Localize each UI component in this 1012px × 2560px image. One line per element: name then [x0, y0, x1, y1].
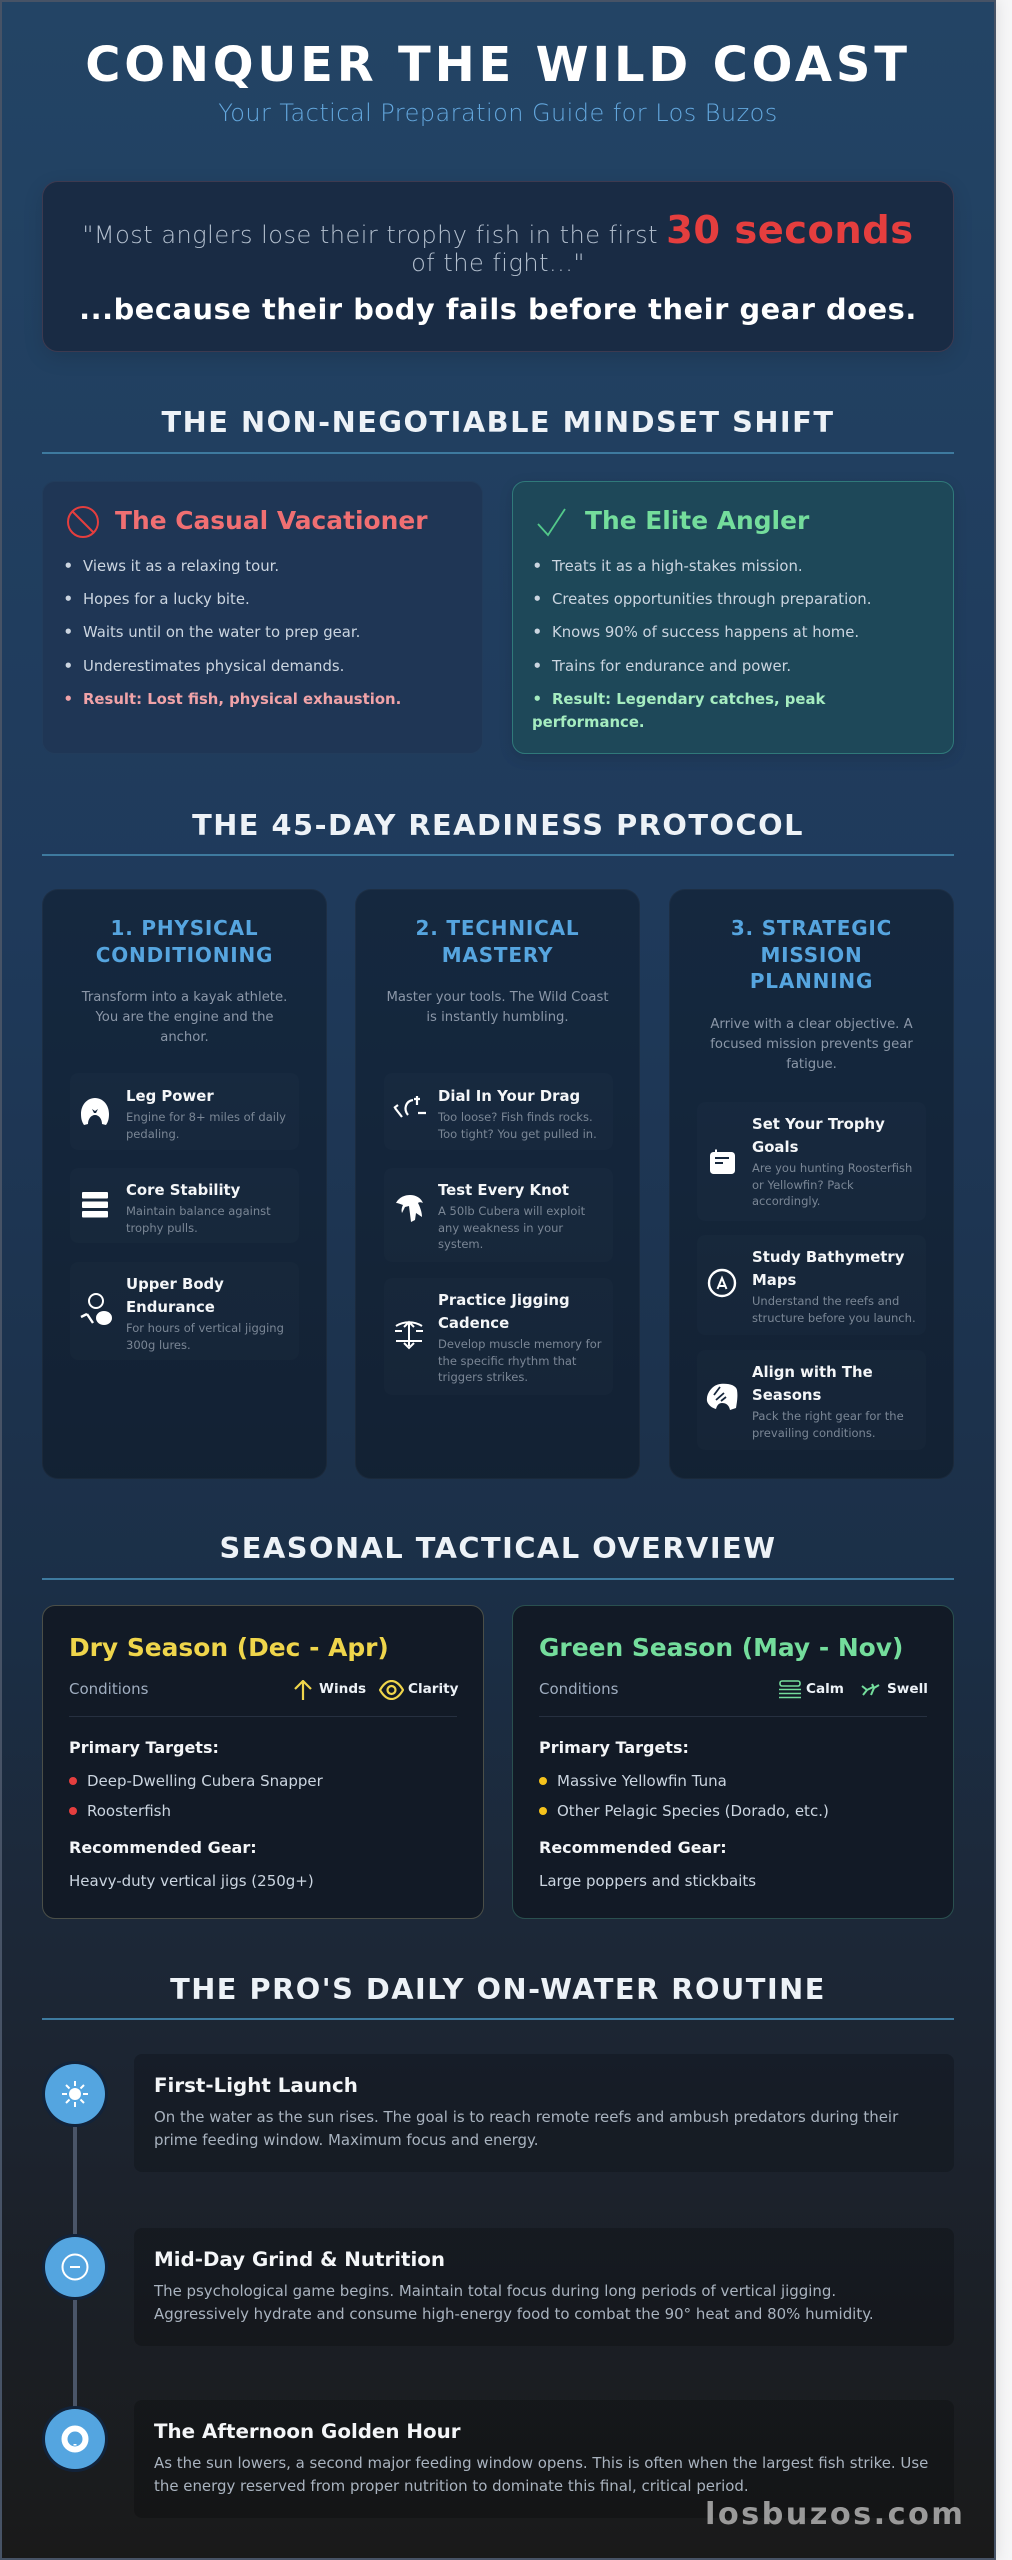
subtitle: Your Tactical Preparation Guide for Los Buzos	[218, 99, 778, 127]
item text	[126, 1204, 271, 1235]
elite angler list: Creates opportunities through preparation.	[552, 590, 871, 608]
item text: system.	[438, 1237, 483, 1251]
item text: Engine for 8+ miles of daily	[126, 1110, 286, 1124]
step text: the energy reserved from proper nutrition to dominate this final, critical period.	[154, 2477, 749, 2495]
icon: minus circle	[60, 2252, 90, 2282]
targets list: Deep-Dwelling Cubera Snapper	[87, 1772, 323, 1790]
icon: check mark	[537, 508, 566, 536]
icon: map circle	[708, 1268, 736, 1298]
panel: technical mastery	[355, 889, 640, 1479]
column description: fatigue.	[786, 1057, 837, 1072]
panel: the casual vacationer: •	[64, 656, 73, 674]
icon: prohibited	[67, 506, 99, 538]
step: afternoon golden hour	[134, 2400, 954, 2518]
item text: prevailing conditions.	[752, 1426, 876, 1440]
item heading: Set Your Trophy	[752, 1115, 885, 1133]
swell label: Swell	[887, 1681, 928, 1697]
icon: jig cadence	[395, 1320, 423, 1350]
item heading: Dial In Your Drag	[438, 1087, 580, 1105]
item text	[126, 1110, 286, 1141]
item text: Pack the right gear for the	[752, 1409, 904, 1423]
season heading: Green Season (May - Nov)	[539, 1633, 903, 1662]
item text: any weakness in your	[438, 1221, 563, 1235]
icon: leg	[81, 1098, 109, 1125]
panel: the elite angler: •	[532, 656, 542, 674]
item heading	[752, 1115, 885, 1156]
panel: the elite angler: •	[532, 590, 542, 608]
item heading: Goals	[752, 1138, 798, 1156]
column description: Arrive with a clear objective. A	[710, 1017, 913, 1032]
icon: core bars	[82, 1192, 108, 1218]
item text	[438, 1204, 585, 1251]
icon: wind arrow	[294, 1680, 312, 1700]
icon: season mound	[706, 1384, 738, 1410]
item: upper body endurance	[70, 1262, 299, 1360]
panel: the casual vacationer: •	[64, 623, 73, 641]
quote punchline: ...because their body fails before their gear does.	[79, 292, 917, 326]
panel: strategic mission planning	[669, 889, 954, 1479]
column heading	[731, 916, 892, 993]
step text	[154, 2452, 928, 2499]
timeline marker: sun	[45, 2064, 105, 2124]
item text: Too tight? You get pulled in.	[438, 1127, 597, 1141]
elite angler list: Result: Legendary catches, peak	[552, 690, 825, 708]
item: set your trophy goals	[697, 1102, 926, 1221]
column heading: MISSION	[760, 942, 863, 966]
item text: 300g lures.	[126, 1338, 191, 1352]
column description: anchor.	[160, 1030, 209, 1045]
item heading: Align with The	[752, 1363, 873, 1381]
item text	[126, 1321, 284, 1352]
elite angler list: Trains for endurance and power.	[552, 656, 791, 674]
column description: Master your tools. The Wild Coast	[386, 990, 609, 1005]
gear heading: Recommended Gear:	[69, 1838, 257, 1857]
item: study bathymetry maps	[697, 1235, 926, 1335]
heading: seasonal overview: SEASONAL TACTICAL OVERVIEW	[220, 1531, 776, 1565]
item text: A 50lb Cubera will exploit	[438, 1204, 585, 1218]
step heading: The Afternoon Golden Hour	[154, 2420, 461, 2443]
item text: structure before you launch.	[752, 1311, 916, 1325]
item heading: Leg Power	[126, 1087, 214, 1105]
item heading	[438, 1291, 570, 1332]
item text: trophy pulls.	[126, 1221, 198, 1235]
heading: casual vacationer: The Casual Vacationer	[115, 506, 428, 535]
column description	[82, 990, 287, 1045]
icon: drag reel	[393, 1096, 426, 1118]
panel: green season	[512, 1605, 954, 1919]
item text: Too loose? Fish finds rocks.	[438, 1110, 593, 1124]
item text: the specific rhythm that	[438, 1354, 576, 1368]
clarity label: Clarity	[408, 1681, 459, 1697]
elite angler list: Treats it as a high-stakes mission.	[552, 557, 803, 575]
column heading: PLANNING	[750, 969, 873, 993]
icon: calm bars	[779, 1680, 801, 1698]
timeline marker: mid-day	[45, 2237, 105, 2297]
targets list: Massive Yellowfin Tuna	[557, 1772, 727, 1790]
item heading: Upper Body	[126, 1275, 224, 1293]
item: dial in your drag	[384, 1073, 613, 1150]
item heading	[752, 1363, 873, 1404]
casual vacationer list: Views it as a relaxing tour.	[83, 557, 279, 575]
casual vacationer list	[64, 557, 401, 708]
step: first-light launch	[134, 2054, 954, 2172]
targets list	[69, 1772, 323, 1820]
panel: the elite angler: •	[532, 623, 542, 641]
targets list	[539, 1772, 829, 1820]
column description: Transform into a kayak athlete.	[82, 990, 287, 1005]
gear heading: Recommended Gear:	[539, 1838, 727, 1857]
icon: ring	[60, 2424, 90, 2454]
step text: As the sun lowers, a second major feeding window opens. This is often when the largest fish strike. Use	[154, 2454, 928, 2472]
panel: physical conditioning	[42, 889, 327, 1479]
item heading: Core Stability	[126, 1181, 240, 1199]
item text	[438, 1337, 602, 1384]
heading: daily routine: THE PRO'S DAILY ON-WATER ROUTINE	[170, 1972, 826, 2006]
panel: the casual vacationer: •	[64, 690, 73, 708]
column description: focused mission prevents gear	[710, 1037, 913, 1052]
icon: swell arrows	[861, 1684, 880, 1696]
quote first line: "Most anglers lose their trophy fish in the first 30 seconds	[82, 208, 914, 253]
item heading: Endurance	[126, 1298, 215, 1316]
item text	[752, 1294, 916, 1325]
item text: pedaling.	[126, 1127, 179, 1141]
column description: You are the engine and the	[95, 1010, 274, 1025]
item text: For hours of vertical jigging	[126, 1321, 284, 1335]
step text: prime feeding window. Maximum focus and energy.	[154, 2131, 538, 2149]
step text	[154, 2106, 898, 2153]
panel: the casual vacationer: •	[64, 590, 73, 608]
step heading: Mid-Day Grind & Nutrition	[154, 2248, 445, 2271]
casual vacationer list: Hopes for a lucky bite.	[83, 590, 250, 608]
item text: Maintain balance against	[126, 1204, 271, 1218]
winds label: Winds	[319, 1681, 366, 1697]
item text: Are you hunting Roosterfish	[752, 1161, 912, 1175]
icon: arm and dumbbell	[80, 1293, 112, 1325]
icon: trophy note	[710, 1150, 735, 1174]
step text	[154, 2280, 874, 2327]
heading: elite angler: The Elite Angler	[585, 506, 809, 535]
item text	[752, 1409, 904, 1440]
step text: Aggressively hydrate and consume high-energy food to combat the 90° heat and 80% humidity.	[154, 2305, 874, 2323]
elite angler list	[532, 557, 871, 731]
item heading: Seasons	[752, 1386, 821, 1404]
panel: the elite angler	[512, 481, 954, 754]
panel: dry season	[42, 1605, 484, 1919]
item text	[752, 1161, 912, 1208]
item heading: Practice Jigging	[438, 1291, 570, 1309]
watermark: losbuzos.com	[705, 2497, 965, 2532]
targets heading: Primary Targets:	[69, 1738, 219, 1757]
icon: sun	[60, 2079, 90, 2109]
column heading: MASTERY	[442, 942, 553, 966]
column heading: CONDITIONING	[96, 942, 273, 966]
heading: readiness protocol: THE 45-DAY READINESS PROTOCOL	[192, 808, 804, 842]
item heading: Cadence	[438, 1314, 509, 1332]
casual vacationer list: Waits until on the water to prep gear.	[83, 623, 360, 641]
targets heading: Primary Targets:	[539, 1738, 689, 1757]
item heading: Test Every Knot	[438, 1181, 569, 1199]
icon: eye	[379, 1680, 404, 1700]
column heading: 1. PHYSICAL	[111, 916, 258, 940]
step text: On the water as the sun rises. The goal is to reach remote reefs and ambush predators during their	[154, 2108, 898, 2126]
item text	[438, 1110, 597, 1141]
title: CONQUER THE WILD COAST	[85, 37, 911, 93]
column heading	[416, 916, 579, 966]
column heading	[96, 916, 273, 966]
item text: Understand the reefs and	[752, 1294, 899, 1308]
item heading: Maps	[752, 1271, 796, 1289]
casual vacationer list: Underestimates physical demands.	[83, 656, 344, 674]
item heading: Study Bathymetry	[752, 1248, 904, 1266]
item text: or Yellowfin? Pack	[752, 1178, 854, 1192]
column heading: 2. TECHNICAL	[416, 916, 579, 940]
gear text: Heavy-duty vertical jigs (250g+)	[69, 1872, 314, 1890]
column description	[386, 990, 609, 1025]
panel: the casual vacationer: •	[64, 557, 73, 575]
item text: accordingly.	[752, 1194, 820, 1208]
step heading: First-Light Launch	[154, 2074, 358, 2097]
icon: knot	[396, 1195, 423, 1222]
item text: Develop muscle memory for	[438, 1337, 601, 1351]
item heading	[752, 1248, 904, 1289]
panel: the casual vacationer	[42, 481, 483, 754]
item: align with the seasons	[697, 1350, 926, 1450]
panel: the elite angler: •	[532, 690, 542, 708]
targets list: Other Pelagic Species (Dorado, etc.)	[557, 1802, 829, 1820]
season heading: Dry Season (Dec - Apr)	[69, 1633, 389, 1662]
step: mid-day grind and nutrition	[134, 2228, 954, 2346]
elite angler list: Knows 90% of success happens at home.	[552, 623, 859, 641]
item heading	[126, 1275, 224, 1316]
column heading: 3. STRATEGIC	[731, 916, 892, 940]
item text: triggers strikes.	[438, 1370, 528, 1384]
timeline marker: golden hour	[45, 2409, 105, 2469]
item: core stability	[70, 1168, 299, 1243]
targets list: Roosterfish	[87, 1802, 171, 1820]
column description: is instantly humbling.	[426, 1010, 569, 1025]
calm label: Calm	[806, 1681, 844, 1697]
item: test every knot	[384, 1168, 613, 1262]
item: practice jigging cadence	[384, 1278, 613, 1395]
gear text: Large poppers and stickbaits	[539, 1872, 756, 1890]
column description	[710, 1017, 913, 1072]
heading: mindset shift: THE NON-NEGOTIABLE MINDSET SHIFT	[162, 405, 834, 439]
panel: the elite angler: •	[532, 557, 542, 575]
quote second line: of the fight..."	[411, 249, 585, 277]
conditions label: Conditions	[69, 1680, 148, 1698]
step text: The psychological game begins. Maintain total focus during long periods of vertical jigging.	[154, 2282, 836, 2300]
elite angler list: performance.	[532, 713, 645, 731]
conditions label: Conditions	[539, 1680, 618, 1698]
panel: quote callout	[42, 181, 954, 352]
item: leg power	[70, 1073, 299, 1150]
casual vacationer list: Result: Lost fish, physical exhaustion.	[83, 690, 401, 708]
